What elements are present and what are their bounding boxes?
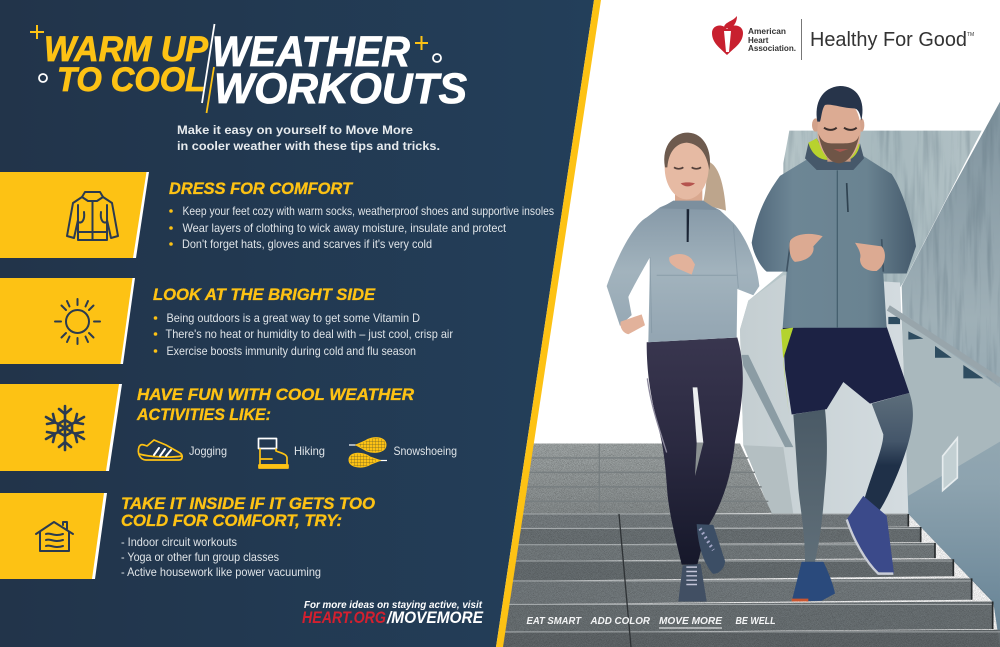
- man shorts: [783, 327, 909, 415]
- handrail: [888, 308, 1000, 381]
- woman hands: [669, 254, 695, 275]
- title: WARM UP: [44, 30, 209, 69]
- bullet list: [154, 311, 453, 358]
- logo wordmark: American: [748, 27, 786, 36]
- yellow band with snowflake icon: [0, 384, 122, 471]
- bullet list: [169, 204, 554, 251]
- icon: snowshoes: [349, 438, 387, 467]
- heading: [121, 494, 375, 530]
- footer call to action: HEART.ORG: [302, 609, 386, 627]
- yellow band with sun icon: [0, 278, 135, 364]
- panel: look at the bright side: [0, 278, 453, 364]
- Healthy For Good text: Healthy For Good: [810, 29, 967, 51]
- brand navigation: MOVE MORE: [659, 615, 723, 627]
- subtitle: Make it easy on yourself to Move More: [177, 123, 413, 137]
- logo wordmark: [748, 27, 796, 53]
- photo: two runners on outdoor concrete stairs: [500, 86, 1000, 647]
- yellow band with house icon: [0, 493, 107, 579]
- icon: hiking boot: [258, 438, 288, 468]
- subtitle: in cooler weather with these tips and tricks.: [177, 139, 440, 153]
- bullet list: Don't forget hats, gloves and scarves if it's very cold: [182, 237, 432, 251]
- subtitle: [177, 123, 440, 153]
- list: - Yoga or other fun group classes: [121, 550, 279, 564]
- brand navigation: ADD COLOR: [590, 615, 650, 627]
- logo wordmark: Heart: [748, 36, 769, 45]
- icon: jogging shoe: [138, 440, 182, 460]
- lower granite stairs: [500, 514, 1000, 647]
- man head: [805, 86, 864, 170]
- list: - Active housework like power vacuuming: [121, 565, 321, 579]
- label: snowshoeing: Snowshoeing: [394, 444, 457, 458]
- footer call to action: For more ideas on staying active, visit: [304, 599, 482, 611]
- heading: LOOK AT THE BRIGHT SIDE: [153, 285, 376, 304]
- man shoes: [792, 496, 894, 602]
- footer call to action: /MOVEMORE: [386, 609, 484, 627]
- list: [121, 535, 321, 579]
- title: WORKOUTS: [214, 65, 467, 113]
- panel: dress for comfort: [0, 172, 554, 258]
- brand navigation: BE WELL: [736, 615, 776, 627]
- heading: HAVE FUN WITH COOL WEATHER: [137, 385, 415, 404]
- man legs: [793, 409, 827, 562]
- man jacket: [752, 156, 916, 328]
- upper stairs: [522, 443, 772, 514]
- logo wordmark: Association.: [748, 44, 796, 53]
- panel: cool weather activities: [0, 384, 457, 471]
- woman shoes: [678, 524, 725, 602]
- bullet list: Keep your feet cozy with warm socks, weatherproof shoes and supportive insoles: [182, 204, 554, 218]
- woman runner body: [607, 201, 759, 602]
- bullet list: There's no heat or humidity to deal with – just cool, crisp air: [166, 327, 453, 341]
- man hands: [789, 234, 823, 262]
- list: - Indoor circuit workouts: [121, 535, 237, 549]
- back concrete wall: [740, 131, 982, 514]
- label: hiking: Hiking: [294, 444, 325, 458]
- woman head: [660, 133, 726, 211]
- right concrete wall: [888, 102, 1000, 647]
- bullet list: Exercise boosts immunity during cold and flu season: [166, 344, 416, 358]
- woman jacket: [607, 201, 759, 342]
- heading: [136, 385, 415, 424]
- logo: American Heart Association / Healthy For Good: [712, 16, 974, 60]
- panel: navy information panel: [0, 0, 601, 647]
- bullet list: Wear layers of clothing to wick away moisture, insulate and protect: [182, 221, 507, 235]
- icon: heart and torch: [712, 16, 743, 55]
- heading: COLD FOR COMFORT, TRY:: [121, 511, 342, 530]
- window on wall: [943, 438, 957, 490]
- panel: take it inside: [0, 493, 375, 579]
- heading: TAKE IT INSIDE IF IT GETS TOO: [121, 494, 375, 513]
- title: WEATHER: [212, 28, 410, 76]
- footer call to action: [302, 599, 484, 627]
- title: [30, 24, 467, 113]
- Healthy For Good text: TM: [967, 32, 974, 38]
- man runner body: [752, 156, 916, 602]
- woman legs: [647, 338, 743, 565]
- runner heads: [660, 86, 864, 211]
- label: jogging: Jogging: [189, 444, 227, 458]
- brand navigation: EAT SMART: [526, 615, 582, 627]
- heading: ACTIVITIES LIKE:: [136, 405, 271, 424]
- heading: DRESS FOR COMFORT: [169, 179, 354, 198]
- yellow band with jacket icon: [0, 172, 149, 258]
- bullet list: Being outdoors is a great way to get some Vitamin D: [166, 311, 420, 325]
- brand navigation: [526, 615, 776, 628]
- title: TO COOL: [57, 61, 205, 99]
